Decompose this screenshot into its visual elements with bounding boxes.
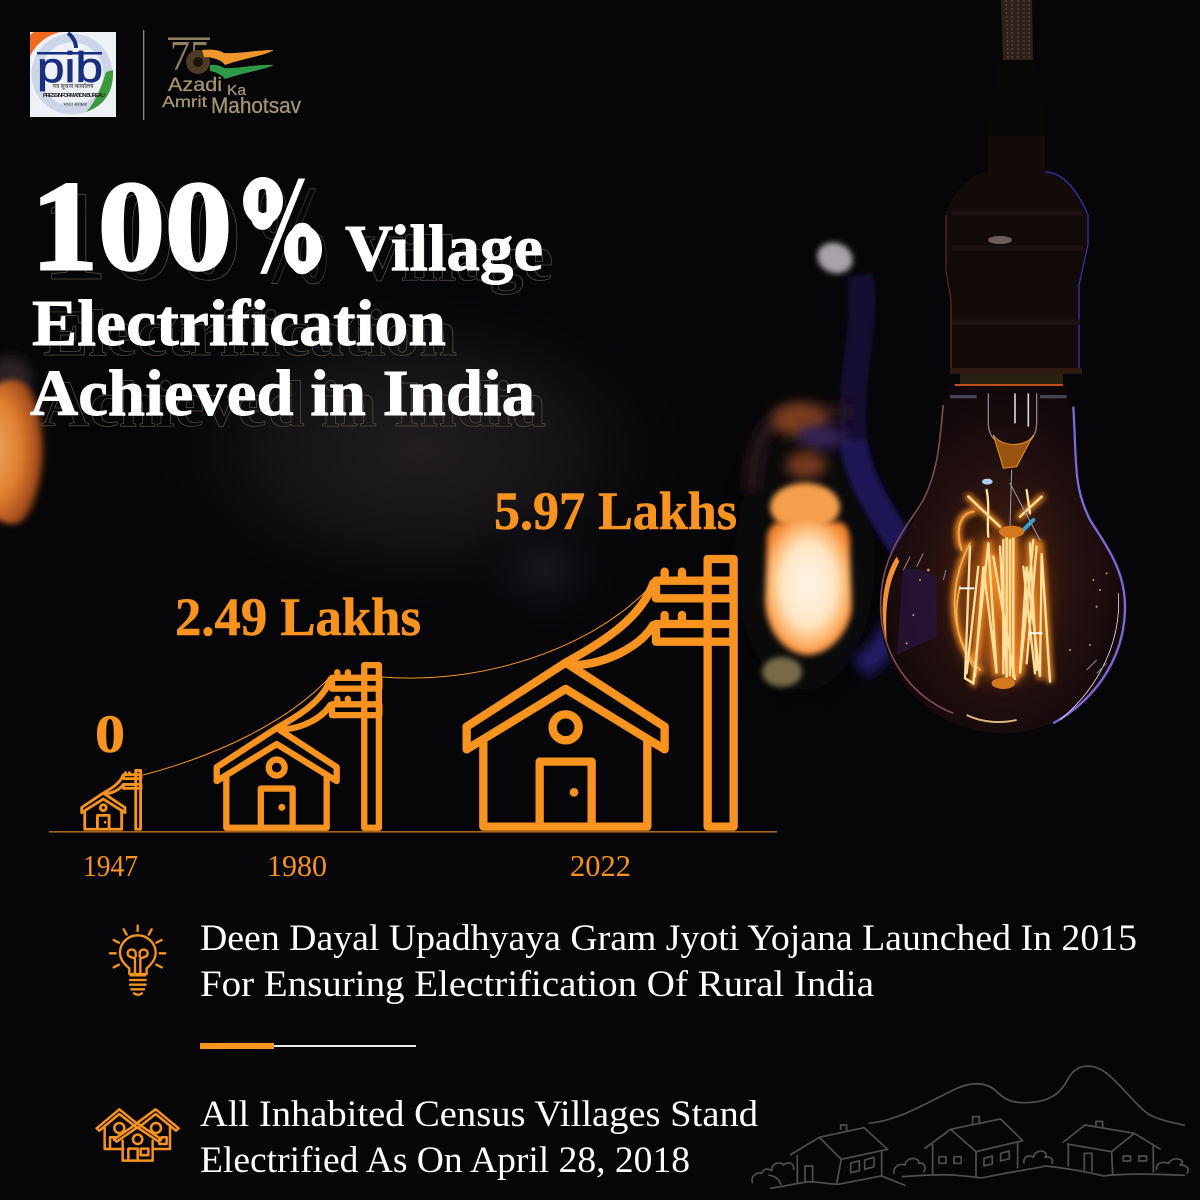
year labels: 2022 [570,848,631,883]
logo divider [143,30,144,120]
chart baseline [49,831,777,833]
connecting wires [143,587,650,775]
title: Electrification [32,287,446,360]
title: % [241,148,323,303]
logo: Azadi Ka Amrit Mahotsav: Amrit [162,94,208,111]
chart: villages electrified over time [49,481,777,883]
bulb socket and cord [945,0,1088,387]
illustration: village outline [752,1066,1188,1188]
logo: Azadi Ka Amrit Mahotsav: Azadi [168,74,222,96]
icon: light bulb idea [110,926,165,995]
icon: house with pole 1980 [217,665,379,828]
logo: Azadi Ka Amrit Mahotsav [162,34,301,118]
glass rim highlights [881,393,1125,723]
chart value: 0: 0 [95,704,125,764]
title outline echo [41,158,553,441]
title outline echo: 100 [41,165,242,307]
year labels: 1980 [267,848,327,883]
glowing filament [955,470,1050,689]
logo: Azadi Ka Amrit Mahotsav: Ka [227,82,247,99]
logo: PIB: PRESS INFORMATION BUREAU [43,93,105,99]
title: Village [345,212,543,285]
text: Deen Dayal scheme: For Ensuring Electrification Of Rural India [200,964,874,1005]
logo: PIB: भारत सरकार [63,101,88,108]
logo: PIB [30,32,116,117]
text: all villages electrified: Electrified As On April 28, 2018 [200,1140,690,1181]
title: Achieved in India [30,357,535,430]
title: 100 [31,155,232,297]
text: all villages electrified [200,1094,759,1181]
logo: PIB: पत्र सूचना कार्यालय [53,81,94,90]
icon: house with pole 2022 [467,559,734,827]
divider [200,1043,416,1049]
icon: village houses [97,1109,179,1161]
photo: hanging light bulb [880,0,1127,733]
logo: PIB: pib [37,44,103,92]
year labels: 1947 [83,848,138,883]
title outline echo: % [252,158,334,313]
text: all villages electrified: All Inhabited Census Villages Stand [200,1094,759,1135]
title outline echo: Achieved in India [41,368,546,441]
text: Deen Dayal scheme: Deen Dayal Upadhyaya Gram Jyoti Yojana Launched In 2015 [200,918,1137,959]
title outline echo: Electrification [43,297,457,370]
logo: Azadi Ka Amrit Mahotsav: Mahotsav [211,93,301,118]
glass bulb [880,386,1127,733]
title [30,148,543,430]
logo: Azadi Ka Amrit Mahotsav: 75 [170,34,210,80]
chart value: 2.49 Lakhs: 2.49 Lakhs [175,587,421,647]
title outline echo: Village [355,222,553,295]
year labels [83,848,631,883]
chart value: 5.97 Lakhs: 5.97 Lakhs [494,481,737,541]
text: Deen Dayal scheme [200,918,1137,1005]
icon: house with pole 1947 [82,770,141,829]
